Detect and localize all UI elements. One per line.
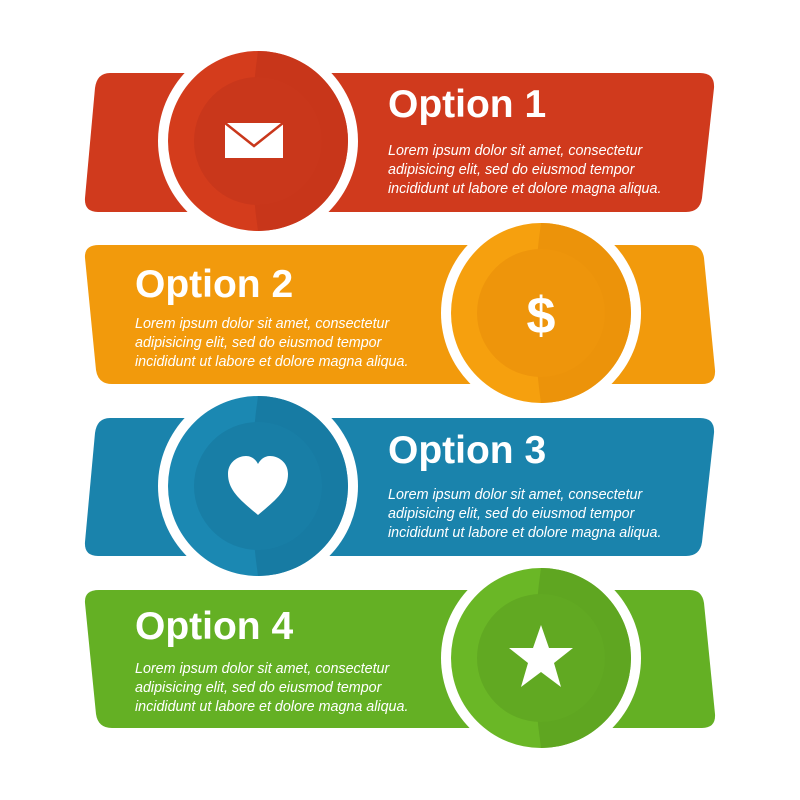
text 1: Lorem ipsum dolor sit amet, consectetur	[388, 143, 644, 159]
title 4: Option 4	[135, 605, 293, 648]
text 1: incididunt ut labore et dolore magna aliqua.	[388, 181, 661, 197]
icon circle 1	[168, 51, 348, 231]
text 1	[388, 143, 661, 197]
panel: option 4	[85, 558, 715, 758]
panel: option 1	[85, 41, 714, 241]
title 1: Option 1	[388, 83, 546, 126]
icon: dollar: $	[527, 287, 556, 345]
text 3: incididunt ut labore et dolore magna aliqua.	[388, 525, 661, 541]
text 1: adipisicing elit, sed do eiusmod tempor	[388, 162, 636, 178]
icon: star	[509, 625, 573, 687]
text 3	[388, 487, 661, 541]
icon circle 3	[168, 396, 348, 576]
text 4: incididunt ut labore et dolore magna aliqua.	[135, 699, 408, 715]
text 3: Lorem ipsum dolor sit amet, consectetur	[388, 487, 644, 503]
icon circle 2	[451, 223, 631, 403]
text 2: incididunt ut labore et dolore magna aliqua.	[135, 354, 408, 370]
icon: heart	[228, 456, 288, 515]
banner 4	[85, 590, 715, 728]
text 2: Lorem ipsum dolor sit amet, consectetur	[135, 316, 391, 332]
text 2: adipisicing elit, sed do eiusmod tempor	[135, 335, 383, 351]
panel: option 3	[85, 386, 714, 586]
text 4: adipisicing elit, sed do eiusmod tempor	[135, 680, 383, 696]
text 2	[135, 316, 408, 370]
banner 2	[85, 245, 715, 384]
title 3: Option 3	[388, 429, 546, 472]
text 4	[135, 661, 408, 715]
title 2: Option 2	[135, 263, 293, 306]
text 4: Lorem ipsum dolor sit amet, consectetur	[135, 661, 391, 677]
banner 3	[85, 418, 714, 556]
text 3: adipisicing elit, sed do eiusmod tempor	[388, 506, 636, 522]
banner 1	[85, 73, 714, 212]
panel: option 2	[85, 213, 715, 413]
icon circle 4	[451, 568, 631, 748]
icon: envelope	[225, 123, 283, 158]
